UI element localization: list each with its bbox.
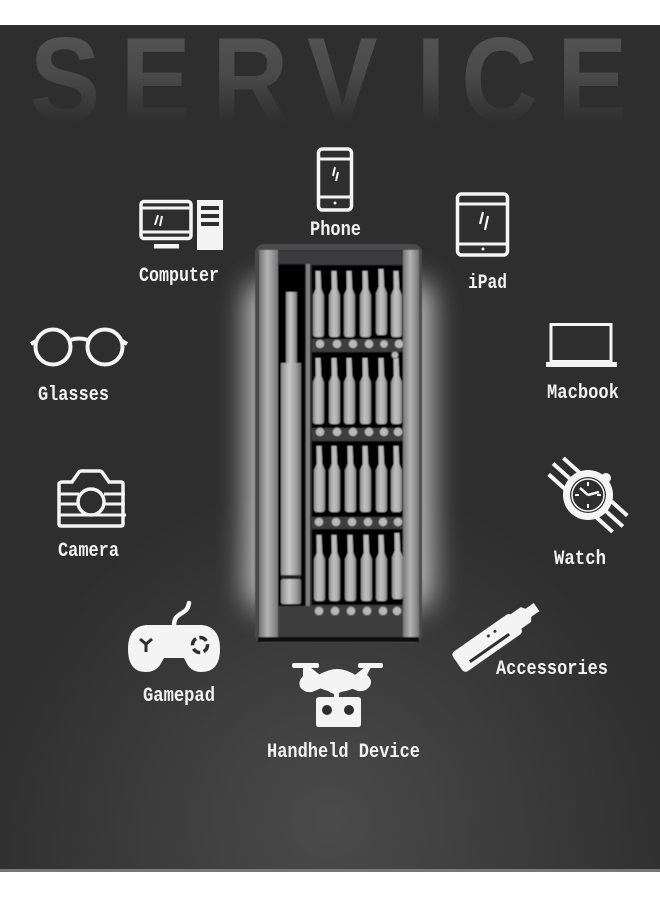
label: Computer: Computer <box>139 265 219 288</box>
label: Phone: Phone <box>310 219 361 242</box>
right rail <box>403 250 419 638</box>
bits row 2 <box>313 358 402 424</box>
label: Camera: Camera <box>58 540 119 563</box>
header bar <box>278 251 403 265</box>
icon: camera <box>59 471 126 526</box>
icon: gamepad <box>128 603 220 672</box>
label: iPad: iPad <box>468 272 507 295</box>
icon: glasses <box>31 330 127 364</box>
icon: accessories tool <box>451 598 544 673</box>
bit compartment <box>312 265 403 606</box>
label: Macbook: Macbook <box>547 382 619 405</box>
bit size markers <box>314 340 404 616</box>
icon: watch <box>546 455 630 535</box>
label: Gamepad: Gamepad <box>143 685 215 708</box>
heading: SERVICE: SERVICE <box>30 13 627 146</box>
label: Glasses: Glasses <box>38 384 109 407</box>
icon: iPad <box>458 194 508 255</box>
glow behind case <box>246 280 432 610</box>
icon: phone <box>318 149 352 210</box>
bits row 4 <box>314 533 403 601</box>
label: Watch: Watch <box>554 548 606 571</box>
label: Accessories: Accessories <box>496 658 608 681</box>
icon: macbook <box>546 324 617 367</box>
handle compartment <box>278 264 305 606</box>
screwdriver handle <box>281 292 301 604</box>
left rail <box>259 250 278 638</box>
label: Handheld Device: Handheld Device <box>267 741 420 764</box>
bits row 3 <box>314 446 402 512</box>
icon: computer <box>141 200 223 250</box>
icon: drone <box>292 663 383 727</box>
bits row 1 <box>313 269 402 337</box>
screwdriver case <box>255 244 422 643</box>
